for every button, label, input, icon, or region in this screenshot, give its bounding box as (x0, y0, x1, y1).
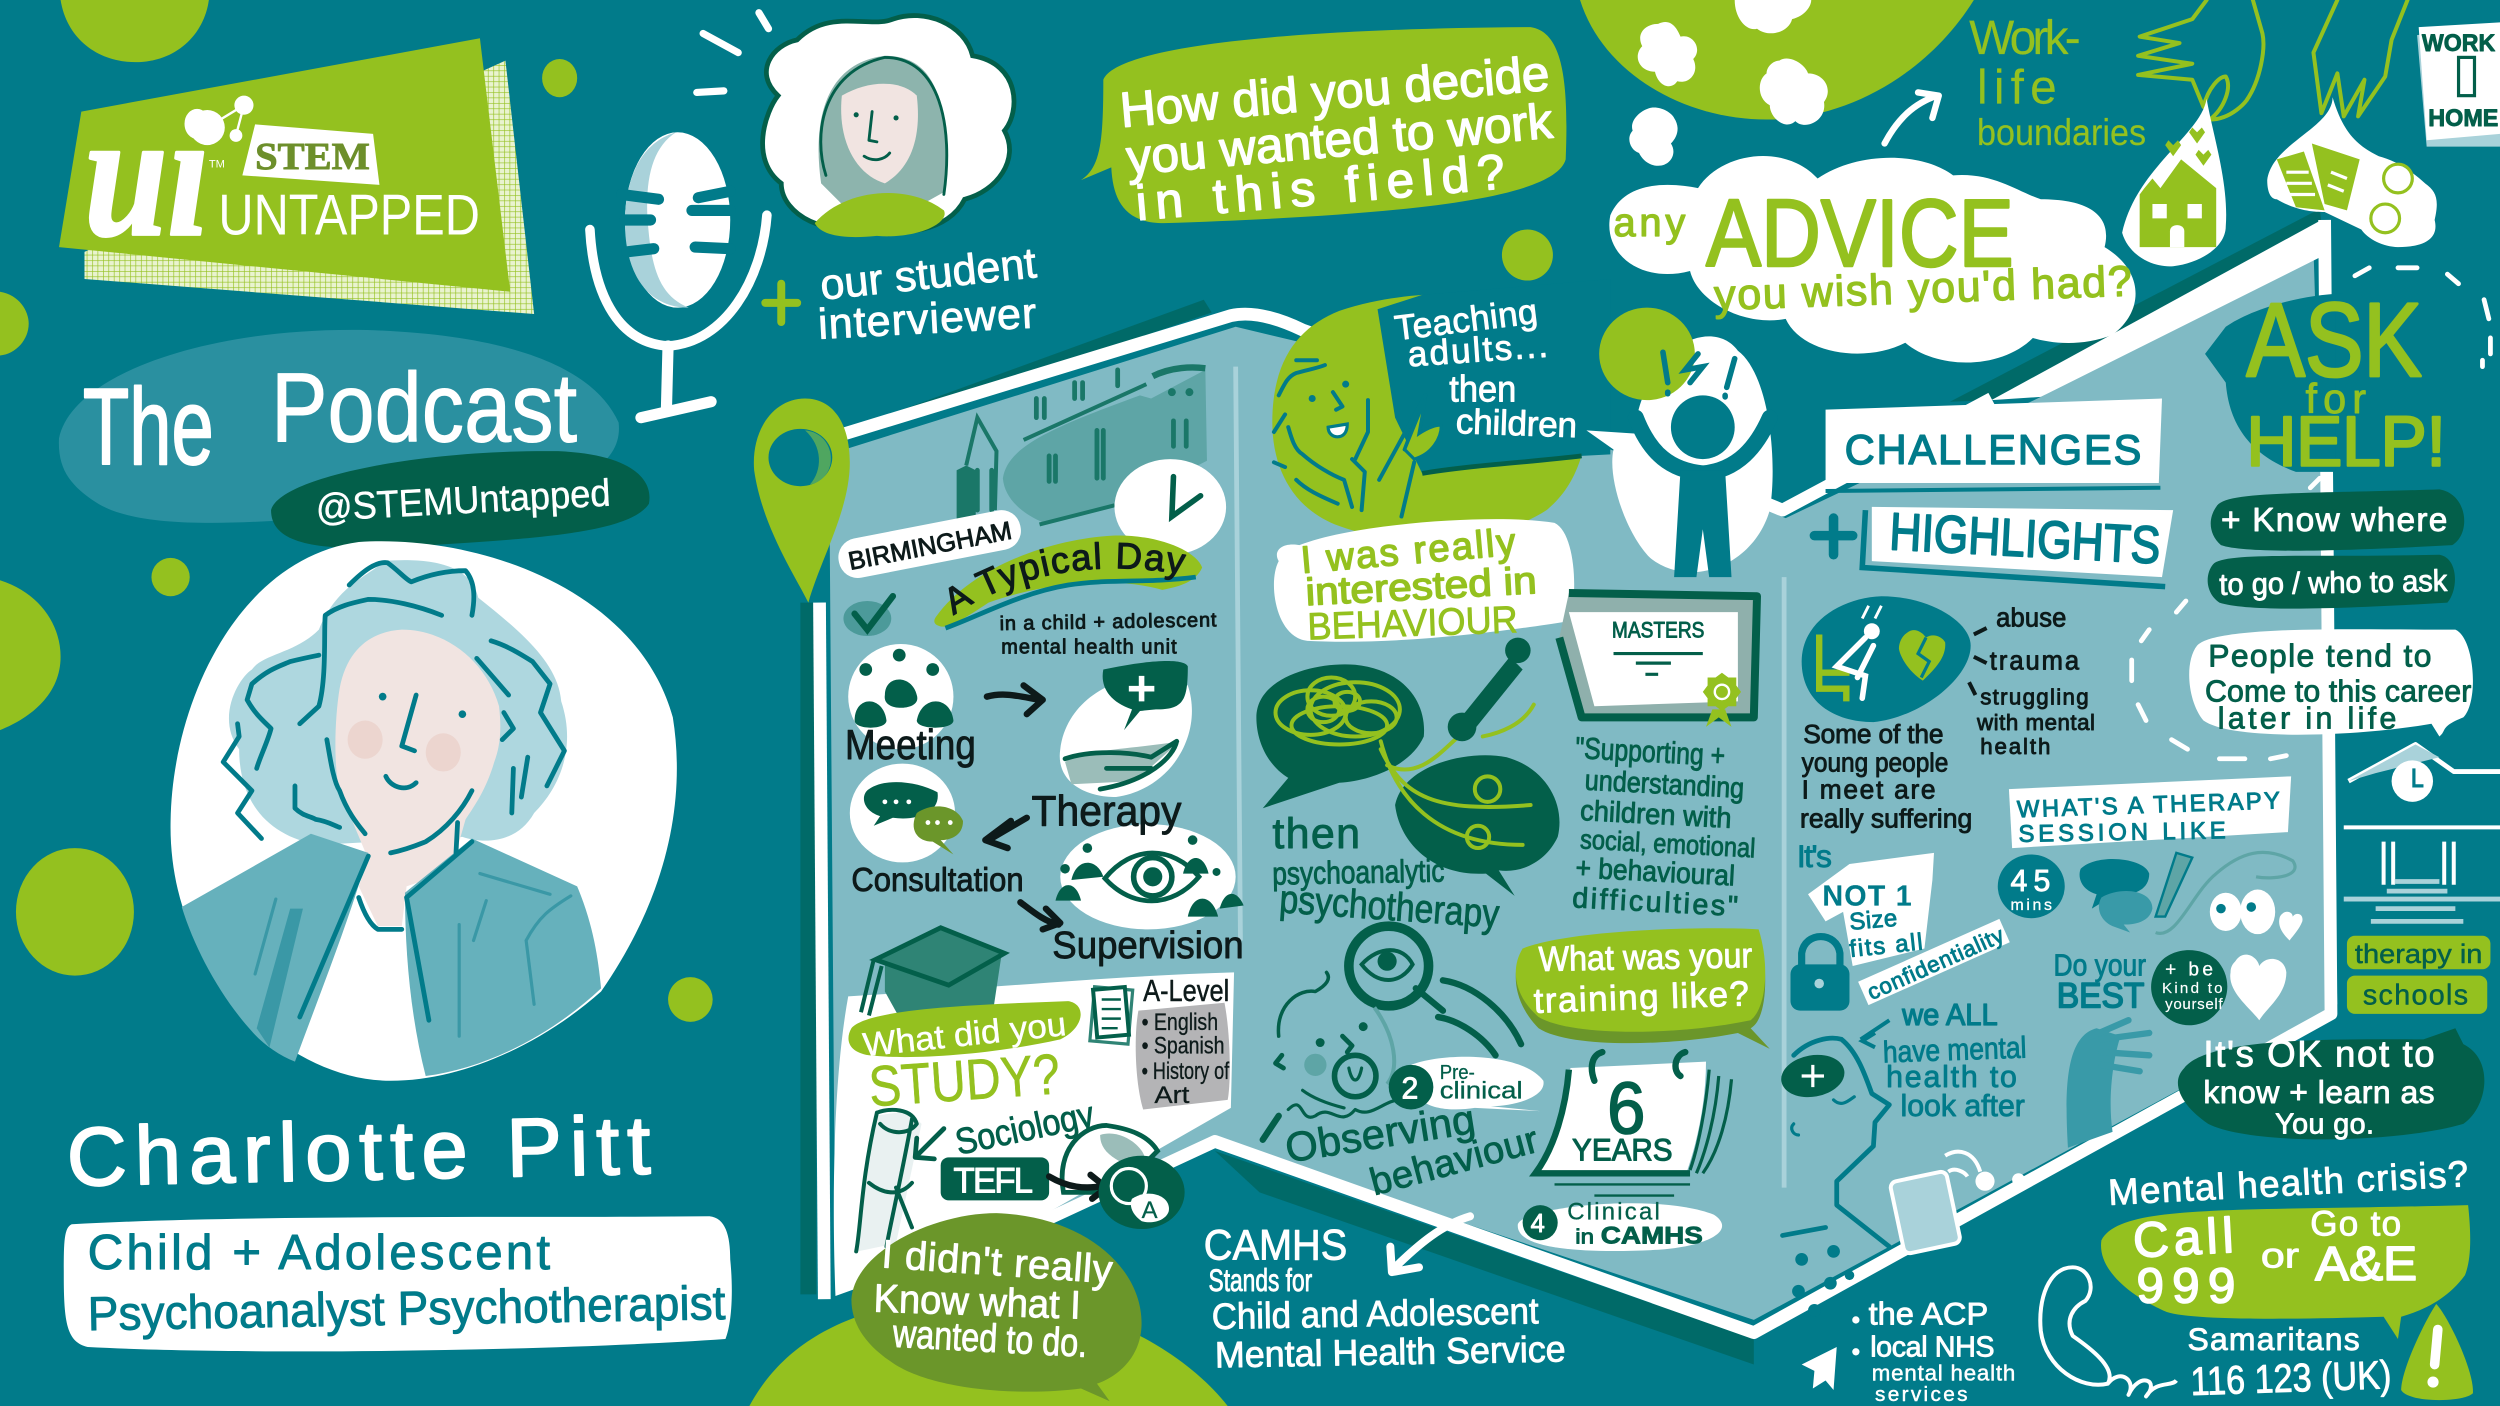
icon: masters certificate (1559, 593, 1760, 727)
title blob: The Podcast: Podcast (271, 353, 577, 463)
logo: STEM Untapped: UNTAPPED (218, 183, 480, 247)
top green circle with flowers (1580, 0, 1974, 166)
icon: work home switch (2417, 22, 2500, 147)
crisis bubble: call 999 or go to A&E: Go to (2310, 1204, 2401, 1243)
bubble: I was really interested in behaviour: interested in (1305, 559, 1538, 614)
icon: big heart (2230, 955, 2286, 1020)
quote: supporting and understanding: children with (1579, 795, 1732, 835)
heading: STUDY?: STUDY? (867, 1042, 1062, 1120)
illness ball with chair and heart (1802, 596, 1971, 722)
bubble: 2 pre-clinical: 2 (1401, 1072, 1418, 1105)
icon: graduation cap (861, 928, 1004, 1020)
text: observing behaviour (1282, 1095, 1543, 1204)
arrow: TEFL to translate (1049, 1175, 1107, 1199)
icon: clock (1114, 459, 1226, 555)
explainer: CAMHS stands for (1204, 1221, 1566, 1376)
text: some of the young people: really suffering (1800, 803, 1972, 833)
icon: t-shirt not 1 size fits all: fits all (1848, 929, 1924, 963)
icon: translate circle: A (1142, 1197, 1158, 1224)
explainer: CAMHS stands for: Stands for (1209, 1262, 1312, 1298)
cloud: any advice (1609, 156, 2136, 362)
text: we all have mental health: have mental (1882, 1032, 2027, 1070)
bubble: 4 clinical in CAMHS: 4 (1531, 1210, 1545, 1238)
list: the ACP local NHS (1852, 1296, 2015, 1406)
bubble: 2 pre-clinical: clinical (1440, 1077, 1523, 1104)
icon: tangled thoughts (1256, 664, 1559, 896)
icon: head profile (1778, 1038, 1889, 1317)
pill: know where: + Know where (2221, 502, 2447, 539)
badge: be kind to yourself: + be (2165, 960, 2213, 981)
icon: plus (765, 284, 797, 322)
quote: supporting and understanding: + behavioural (1575, 852, 1736, 893)
avatar: student interviewer (763, 16, 1014, 237)
ask for help bubble: ASK (2246, 282, 2422, 399)
icon: work home switch: HOME (2428, 105, 2498, 132)
caption: our student interviewer: our student (818, 239, 1039, 310)
list: the ACP local NHS: local NHS (1870, 1332, 1995, 1364)
crisis title: Mental health crisis? (2107, 1153, 2469, 1213)
bubble: teaching adults then children (1272, 279, 1610, 540)
bubble: 4 clinical in CAMHS (1518, 1198, 1722, 1251)
icon: meeting circle (848, 644, 953, 749)
question bubble: How did you decide (1081, 27, 1566, 231)
text: work-life boundaries: life (1977, 62, 2057, 115)
text: observing behaviour: behaviour (1365, 1118, 1543, 1204)
ribbon: confidentiality: confidentiality (1863, 922, 2008, 1005)
pill: schools: schools (2363, 979, 2468, 1011)
icon: consultation bubbles (850, 764, 963, 862)
label: A-Level: A-Level (1143, 975, 1229, 1008)
bubble: it's OK not to know (2178, 1028, 2484, 1140)
crisis bubble: call 999 or go to A&E: A&E (2315, 1238, 2417, 1291)
icon: reaching hand (2067, 1020, 2149, 1148)
text: do your best (2054, 950, 2146, 1015)
icon: masters certificate: MASTERS (1612, 618, 1704, 643)
icon: globe (1062, 1125, 1158, 1192)
icon: therapy session bubbles and pencil (2080, 852, 2303, 941)
pill: schools (2347, 976, 2487, 1014)
list box: subjects (1136, 1003, 1230, 1109)
icon: t-shirt not 1 size fits all: Size (1848, 905, 1898, 936)
text: do your best: Do your (2054, 950, 2146, 983)
list box: subjects: Art (1154, 1082, 1190, 1109)
heading: A Typical Day: A Typical Day (948, 542, 1186, 616)
icon: work home switch: WORK (2422, 30, 2496, 57)
quote: supporting and understanding: understanding (1584, 765, 1745, 805)
question bubble: How did you decide: How did you decide (1118, 46, 1551, 138)
list: the ACP local NHS: the ACP (1869, 1296, 1988, 1332)
text: work-life boundaries (1969, 12, 2146, 153)
crisis bubble: call 999 or go to A&E: or (2261, 1236, 2299, 1275)
label box: TEFL: TEFL (953, 1161, 1033, 1200)
label: Birmingham: BIRMINGHAM (846, 517, 1014, 576)
badge: 45 mins: 45 (2011, 865, 2050, 898)
panel: what did you study: What did you (861, 1006, 1068, 1064)
banner: highlights (1814, 502, 2173, 587)
bubble: it's OK not to know: You go. (2275, 1108, 2374, 1140)
list: abuse trauma struggling: abuse (1996, 604, 2066, 632)
title blob: The Podcast (59, 330, 619, 523)
icon: t-shirt not 1 size fits all (1808, 853, 1934, 966)
text: some of the young people: I meet are (1802, 775, 1936, 805)
icon: phone and wifi (1890, 1152, 2025, 1254)
arrow: CAMHS (1390, 1216, 1470, 1272)
arrow: meeting to therapy (987, 685, 1043, 714)
list: the ACP local NHS: services (1875, 1383, 1967, 1406)
icon: location pin (754, 399, 850, 603)
text: some of the young people (1800, 719, 1972, 833)
text: samaritans 116 123: 116 123 (UK) (2190, 1353, 2392, 1404)
caption: in a child + adolescent mental health unit (999, 609, 1217, 659)
bubble: what was your training like (1516, 928, 1770, 1049)
logo: STEM Untapped (59, 38, 534, 314)
bubble: 4 clinical in CAMHS: in CAMHS (1575, 1222, 1703, 1249)
text: do your best: BEST (2057, 976, 2144, 1015)
banner: what's a therapy session like: WHAT'S A THERAPY (2017, 787, 2280, 823)
bubble: what was your training like: training like? (1533, 974, 1750, 1021)
list: the ACP local NHS: mental health (1872, 1360, 2015, 1385)
text: then psychoanalytic psychotherapy: then (1272, 810, 1360, 858)
label: It's: It's (1797, 838, 1832, 874)
list box: subjects: • English (1142, 1009, 1218, 1036)
list: abuse trauma struggling: health (1980, 734, 2050, 759)
pill: know where (2211, 489, 2464, 551)
illustration: Birmingham buildings (957, 367, 1207, 524)
label: Sociology: Sociology (952, 1093, 1098, 1163)
label: Meeting: Meeting (845, 721, 976, 768)
text: then psychoanalytic psychotherapy: psychotherapy (1278, 877, 1501, 937)
text: we all have mental health (1882, 999, 2027, 1123)
list: abuse trauma struggling: with mental (1976, 710, 2095, 735)
caption: our student interviewer (817, 239, 1039, 349)
bubble: teaching adults then children: then (1449, 369, 1516, 410)
crisis bubble: call 999 or go to A&E: 999 (2136, 1258, 2235, 1313)
icon: t-shirt not 1 size fits all: NOT 1 (1822, 880, 1912, 912)
ask for help bubble: for (2305, 375, 2366, 422)
icon: telephone handset (2040, 1267, 2176, 1396)
quote bubble: I didn't really know what I wanted to do: wanted to do. (891, 1312, 1088, 1366)
text: then psychoanalytic psychotherapy (1272, 810, 1501, 937)
label box: TEFL (941, 1157, 1049, 1200)
list: abuse trauma struggling (1969, 604, 2095, 759)
text: then psychoanalytic psychotherapy: psychoanalytic (1272, 853, 1445, 892)
logo: STEM Untapped: TM (209, 158, 225, 170)
ask for help bubble: HELP! (2246, 402, 2446, 480)
arrow: consultation to supervision (1020, 902, 1060, 929)
icon: magnifying glass eye (1349, 926, 1521, 1055)
banner: challenges (1826, 399, 2162, 491)
badge: be kind to yourself: Kind to (2162, 980, 2223, 997)
quote bubble: I didn't really know what I wanted to do: I didn't really (880, 1232, 1114, 1292)
banner: challenges: CHALLENGES (1845, 426, 2141, 473)
icon: 6 years calendar: YEARS (1572, 1132, 1673, 1168)
quote: supporting and understanding: "Supporting + (1575, 732, 1726, 773)
badge: be kind to yourself (2151, 950, 2227, 1025)
icon: cursor arrow (1802, 1347, 1837, 1390)
role box: Child + Adolescent (88, 1225, 550, 1280)
question bubble: How did you decide: you wanted to work (1124, 94, 1555, 186)
bubble: 2 pre-clinical: Pre- (1440, 1061, 1475, 1084)
crisis bubble: call 999 or go to A&E: Call (2132, 1208, 2235, 1268)
list box: subjects: • History of (1142, 1058, 1230, 1085)
role box (64, 1216, 732, 1351)
name: Charlotte Pitt: Charlotte Pitt (66, 1099, 651, 1204)
label: Supervision: Supervision (1052, 924, 1244, 967)
quote: supporting and understanding (1571, 732, 1756, 923)
arrow: sociology (915, 1129, 944, 1159)
text: observing behaviour: Observing (1282, 1095, 1478, 1171)
cloud: any advice: you wish you'd had? (1713, 258, 2132, 320)
badge: be kind to yourself: yourself (2165, 996, 2223, 1013)
bubble: I was really interested in behaviour: I was really (1299, 520, 1518, 582)
icon: school building (2344, 744, 2500, 921)
icon: microphone (590, 13, 768, 418)
icon: diploma scroll (856, 1110, 922, 1251)
bubble: I was really interested in behaviour (1274, 519, 1574, 649)
bubble: people tend to: People tend to (2208, 637, 2431, 673)
map panel: folded map background (808, 209, 2337, 1365)
portrait: Charlotte Pitt (171, 541, 677, 1081)
label: Therapy: Therapy (1032, 788, 1182, 836)
cloud: any advice: any (1614, 201, 1685, 245)
icon: padlock (1790, 937, 1849, 1011)
bubble: people tend to: Come to this career (2205, 675, 2471, 708)
quote: supporting and understanding: social, emotional (1579, 823, 1756, 863)
bubble: what was your training like: What was your (1538, 936, 1753, 979)
text: work-life boundaries: boundaries (1977, 112, 2146, 153)
question pill: what did you (848, 1001, 1081, 1057)
icon: check mark (843, 596, 893, 636)
caption: our student interviewer: interviewer (817, 290, 1037, 349)
bubble: people tend to (2189, 629, 2473, 736)
bubble: 4 clinical in CAMHS: Clinical (1567, 1198, 1660, 1225)
caption: in a child + adolescent mental health unit: in a child + adolescent (999, 609, 1217, 635)
quote bubble: I didn't really know what I wanted to do: Know what I (873, 1277, 1082, 1328)
icon: 6 years calendar: 6 (1607, 1067, 1645, 1149)
mound: green hill (749, 1296, 1228, 1406)
text: work-life boundaries: Work- (1969, 12, 2081, 65)
list box: subjects: • Spanish (1142, 1033, 1224, 1060)
text: we all have mental health: look after (1901, 1090, 2025, 1123)
icon: caring hand with plus (1060, 661, 1192, 797)
explainer: CAMHS stands for: Mental Health Service (1215, 1328, 1566, 1376)
badge: 45 mins (1998, 854, 2065, 918)
bubble: people tend to: later in life (2218, 703, 2396, 736)
logo: STEM Untapped: ui (85, 75, 209, 273)
handle pill: @STEMUntapped (271, 451, 650, 548)
text: samaritans 116 123 (2188, 1321, 2392, 1404)
icon: eye with team (1055, 824, 1244, 929)
bubble: teaching adults then children: children (1455, 402, 1578, 445)
arrow: therapy to consultation (985, 818, 1027, 848)
bubble: I was really interested in behaviour: BEHAVIOUR (1307, 598, 1518, 649)
illustration: baby face (1263, 972, 1400, 1140)
ask for help bubble (2205, 268, 2490, 488)
panel: what did you study (834, 928, 1234, 1296)
text: some of the young people: Some of the (1803, 719, 1944, 749)
title blob: The Podcast: The (83, 366, 214, 487)
quote bubble: I didn't really know what I wanted to do (851, 1213, 1142, 1401)
icon: documents (1090, 987, 1133, 1044)
dashes: around people bubble (2132, 601, 2286, 759)
list: abuse trauma struggling: struggling (1980, 685, 2089, 710)
bubble: teaching adults then children: Teaching (1392, 292, 1540, 348)
icon: translate circle (1099, 1156, 1185, 1229)
decorative green blobs (0, 0, 1553, 1022)
crisis bubble: call 999 or go to A&E (2101, 1204, 2470, 1339)
list: abuse trauma struggling: trauma (1990, 648, 2080, 676)
arrow: to work-life boundaries (1885, 92, 1939, 143)
bubble: it's OK not to know: It's OK not to (2203, 1033, 2435, 1074)
pill: therapy in: therapy in (2355, 938, 2482, 969)
text: we all have mental health: health to (1886, 1061, 2017, 1094)
caption: in a child + adolescent mental health unit: mental health unit (1001, 637, 1177, 659)
handle pill: @STEMUntapped: @STEMUntapped (315, 472, 612, 530)
text: we all have mental health: we ALL (1901, 999, 1998, 1032)
pill: to go who to ask: to go / who to ask (2219, 565, 2448, 602)
badge: 45 mins: mins (2011, 897, 2052, 914)
cloud: any advice: ADVICE (1706, 180, 2014, 287)
icon: overwhelmed figure (1586, 308, 1773, 577)
banner: what's a therapy session like: SESSION LIKE (2018, 817, 2226, 848)
icon: work drop (2267, 0, 2437, 247)
role box: Psychoanalyst Psychotherapist (87, 1277, 726, 1341)
question bubble: How did you decide: in this field? (1134, 144, 1507, 231)
icon: warning triangle (2401, 1304, 2473, 1400)
icon: wrench (1448, 638, 1531, 741)
banner: what's a therapy session like (2009, 776, 2291, 848)
quote: supporting and understanding: difficulties" (1571, 882, 1739, 923)
banner: highlights: HIGHLIGHTS (1888, 502, 2162, 575)
bubble: 2 pre-clinical (1389, 1057, 1544, 1111)
explainer: CAMHS stands for: Child and Adolescent (1211, 1290, 1539, 1337)
icon: hands and home drop (2122, 0, 2263, 266)
arrow: we all (1861, 1020, 1889, 1047)
text: samaritans 116 123: Samaritans (2188, 1321, 2360, 1357)
explainer: CAMHS stands for: CAMHS (1204, 1221, 1347, 1269)
text: some of the young people: young people (1802, 748, 1948, 778)
label: Consultation: Consultation (851, 862, 1024, 899)
logo: STEM Untapped: STEM (255, 136, 370, 178)
bubble: teaching adults then children: adults... (1406, 326, 1549, 374)
bubble: it's OK not to know: know + learn as (2203, 1074, 2435, 1110)
pill: to go who to ask (2208, 555, 2455, 609)
icon: 6 years calendar (1535, 1052, 1732, 1196)
